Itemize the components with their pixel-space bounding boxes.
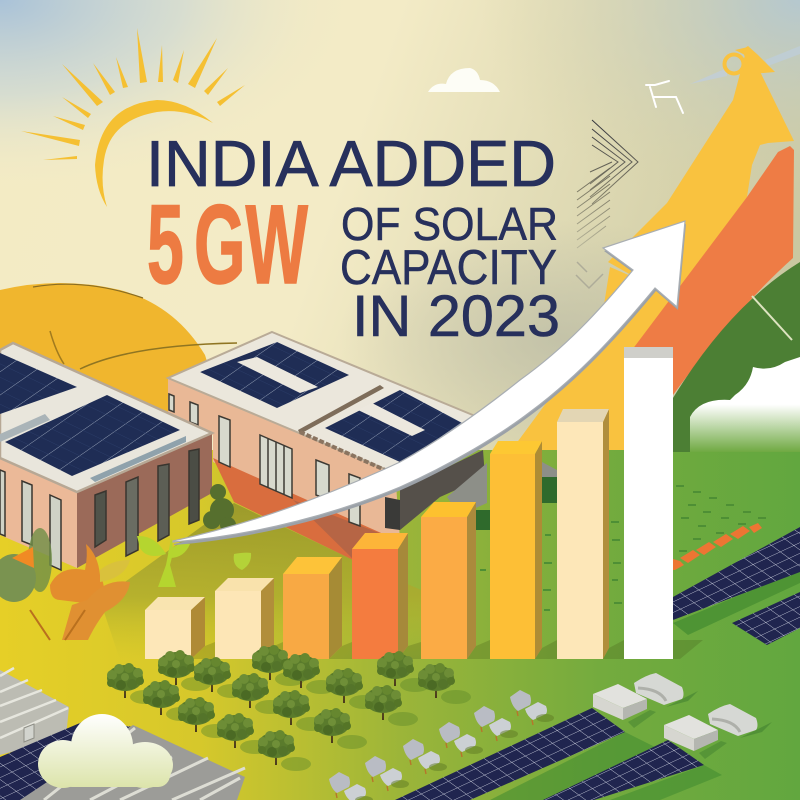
bar 5 xyxy=(421,502,476,659)
side wall xyxy=(0,452,77,568)
bar chart xyxy=(145,347,673,659)
end wall xyxy=(77,433,212,568)
solar panel array xyxy=(5,395,180,476)
roof xyxy=(0,343,212,492)
tree by wall xyxy=(28,528,52,592)
big figure: 5 GW: 5 GW xyxy=(147,182,308,307)
icon: sun ring at peak xyxy=(690,46,800,84)
upper right solar array xyxy=(673,527,800,620)
bar 7 xyxy=(557,409,609,659)
icon: orange solar tiles xyxy=(673,523,762,570)
icon: rising sun with rays xyxy=(21,28,245,207)
shrub xyxy=(203,484,236,533)
bar 4 xyxy=(352,533,408,659)
panel gap xyxy=(237,357,318,393)
orchard trees xyxy=(107,645,471,771)
storage cubes xyxy=(593,673,772,759)
courtyard yard xyxy=(100,503,421,660)
heading line: in 2023: IN 2023 xyxy=(352,284,560,349)
courtyard paving xyxy=(213,458,390,565)
roof xyxy=(168,332,480,472)
lower left solar rooftops xyxy=(0,668,245,800)
building: rear block xyxy=(168,332,557,568)
building: front block xyxy=(0,343,236,602)
lower solar array one xyxy=(395,708,665,800)
grass texture xyxy=(480,486,766,610)
solar panel array upper xyxy=(0,353,77,414)
solar array shadow xyxy=(673,570,800,635)
green hill with mist xyxy=(673,262,800,452)
lower solar array two xyxy=(543,740,722,800)
icon: foreground cloud xyxy=(38,714,173,788)
bar ground shadows xyxy=(191,640,703,659)
heading line: of solar: OF SOLAR xyxy=(341,198,558,250)
decorative chevrons xyxy=(576,120,638,288)
icon: small leaf xyxy=(234,553,251,570)
windows xyxy=(0,449,199,570)
orange rising backdrop xyxy=(630,146,794,420)
windows xyxy=(169,394,360,526)
icon: autumn leaves plant xyxy=(12,544,130,640)
ground xyxy=(0,450,800,800)
bar 3 xyxy=(283,557,342,659)
yellow rising backdrop xyxy=(510,47,794,462)
title xyxy=(146,127,560,349)
icon: large sun xyxy=(0,283,237,420)
bar 2 xyxy=(215,578,274,659)
rising arrow xyxy=(173,221,686,545)
dark glazing xyxy=(385,497,400,530)
heading line: capacity: CAPACITY xyxy=(340,241,557,295)
icon: seedling sprout xyxy=(137,536,190,587)
solar panels front xyxy=(200,342,349,408)
solar panels rear xyxy=(325,390,464,462)
heading line: India added: INDIA ADDED xyxy=(146,127,556,200)
upper right solar array two xyxy=(732,592,800,645)
icon: small cloud xyxy=(428,68,500,92)
grey inverter units xyxy=(329,690,554,800)
bar 6 xyxy=(490,441,542,659)
rear wall xyxy=(168,378,400,540)
bar 1 xyxy=(145,597,205,659)
icon: flying birds xyxy=(646,81,683,113)
bar 8 xyxy=(624,347,673,659)
